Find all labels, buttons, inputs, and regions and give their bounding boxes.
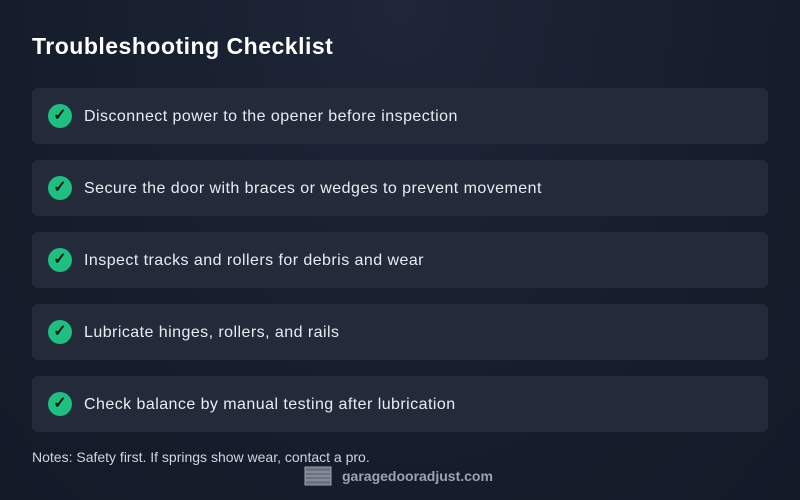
item 3 — [32, 232, 768, 288]
footer brand: garagedooradjust.com — [342, 468, 493, 484]
item 5 — [32, 376, 768, 432]
icon: garage door — [304, 466, 332, 486]
item 4: ✓ — [53, 323, 67, 340]
item 3: Inspect tracks and rollers for debris and wear — [84, 252, 424, 269]
item 2: ✓ — [53, 179, 67, 196]
item 1: Disconnect power to the opener before inspection — [84, 108, 458, 125]
item 1: ✓ — [53, 107, 67, 124]
item 5: Check balance by manual testing after lubrication — [84, 396, 456, 413]
notes: Notes: Safety first. If springs show wear, contact a pro. — [32, 449, 370, 465]
item 3: ✓ — [53, 251, 67, 268]
item 2: Secure the door with braces or wedges to prevent movement — [84, 180, 542, 197]
item 2 — [32, 160, 768, 216]
item 4 — [32, 304, 768, 360]
title: Troubleshooting Checklist — [32, 33, 333, 59]
item 4: Lubricate hinges, rollers, and rails — [84, 324, 339, 341]
item 1 — [32, 88, 768, 144]
footer brand — [304, 466, 493, 486]
item 5: ✓ — [53, 395, 67, 412]
